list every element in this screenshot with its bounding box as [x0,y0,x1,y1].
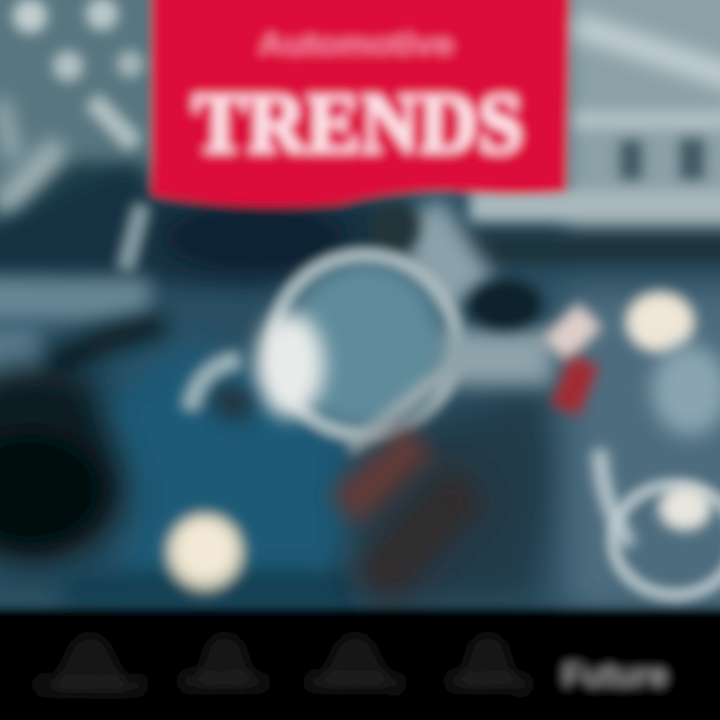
panel: red banner [152,0,570,207]
panel: flag top left [0,0,160,250]
icon: glowing knob [165,512,245,592]
icon: steering wheel [190,255,460,450]
heading: small title: Automotive [258,28,454,61]
footer item 4: Sharing [448,671,528,693]
unblurred footer base [0,625,720,720]
title: TRENDS [193,75,523,171]
panel: right car detail [555,290,720,610]
footer item 2: Electric [182,671,268,693]
footer item 3 [308,635,403,693]
panel: dark red right centre [345,279,560,600]
footer item 2 [182,635,268,693]
footer: black strip [0,608,720,720]
panel: building top right [415,0,720,295]
panel: dark dashboard band [0,165,421,380]
panel: blue centre console [60,340,360,610]
footer item 4 [448,635,528,693]
footer item 5: Future [562,657,668,693]
footer item 1: Connected [38,675,142,697]
footer item 3: Autonomy [308,671,403,693]
footer item 1 [38,635,142,697]
panel: dark left seat [0,365,135,565]
